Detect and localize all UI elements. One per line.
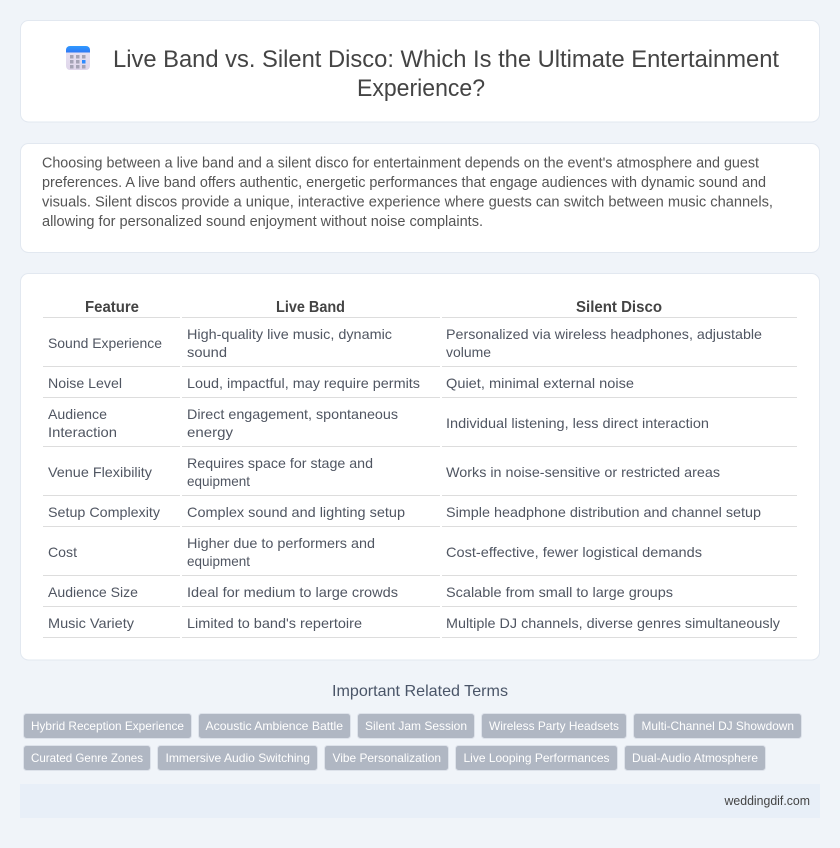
tag [198, 714, 350, 738]
row: setup complexity: Setup Complexity [48, 504, 160, 520]
row: music variety: Limited to band's repertoire [187, 615, 362, 631]
row: sound experience: sound [187, 344, 227, 360]
tag [634, 714, 802, 738]
intro text [42, 156, 773, 230]
icon: calendar [66, 46, 90, 70]
heading: important related terms: Important Related Terms [332, 683, 508, 700]
row: music variety: Music Variety [48, 615, 134, 631]
tag: Acoustic Ambience Battle [206, 719, 343, 733]
title [113, 46, 779, 102]
tag [324, 746, 448, 770]
title: Live Band vs. Silent Disco: Which Is the Ultimate Entertainment [113, 46, 779, 73]
intro text: preferences. A live band offers authentic, energetic performances that engage audiences with dynamic sound and [42, 175, 766, 191]
tag: Hybrid Reception Experience [31, 719, 184, 733]
row: audience interaction: Individual listening, less direct interaction [446, 415, 709, 431]
tag: Live Looping Performances [464, 751, 610, 765]
tag [24, 746, 150, 770]
row: noise level [48, 375, 634, 391]
tag [482, 714, 626, 738]
row: cost: Cost [48, 544, 77, 560]
row: setup complexity [48, 504, 761, 520]
row: audience interaction: energy [187, 424, 233, 440]
row: audience size: Audience Size [48, 584, 138, 600]
tag [24, 714, 192, 738]
panel: header [20, 20, 820, 122]
row: venue flexibility: Requires space for stage and [187, 455, 373, 471]
row: sound experience [48, 326, 762, 360]
row: audience size: Scalable from small to large groups [446, 584, 673, 600]
row: venue flexibility: equipment [187, 473, 250, 489]
row: setup complexity: Simple headphone distribution and channel setup [446, 504, 761, 520]
row: noise level: Noise Level [48, 375, 122, 391]
row: noise level: Quiet, minimal external noise [446, 375, 634, 391]
row: noise level: Loud, impactful, may require permits [187, 375, 420, 391]
tag [456, 746, 618, 770]
row: cost: Higher due to performers and [187, 535, 375, 551]
row: sound experience: Sound Experience [48, 335, 162, 351]
row: cost [48, 535, 702, 569]
row: sound experience: Personalized via wireless headphones, adjustable [446, 326, 762, 342]
panel: intro paragraph [20, 144, 820, 252]
row: audience size: Ideal for medium to large crowds [187, 584, 398, 600]
tag [158, 746, 318, 770]
tag [358, 714, 474, 738]
row: sound experience: High-quality live music, dynamic [187, 326, 392, 342]
row: audience size [48, 584, 673, 600]
intro text: Choosing between a live band and a silent disco for entertainment depends on the event's atmosphere and guest [42, 156, 759, 172]
tag: Dual-Audio Atmosphere [632, 751, 758, 765]
table header row: Feature [85, 299, 139, 316]
table header row: Live Band [276, 299, 345, 316]
title: Experience? [357, 75, 485, 102]
tag: Immersive Audio Switching [166, 751, 310, 765]
row: music variety: Multiple DJ channels, diverse genres simultaneously [446, 615, 780, 631]
table header row: Silent Disco [576, 299, 662, 316]
row: audience interaction: Interaction [48, 424, 117, 440]
table header row [85, 299, 662, 316]
row: cost: Cost-effective, fewer logistical demands [446, 544, 702, 560]
related term tags [24, 714, 802, 770]
panel: comparison table [20, 274, 820, 660]
row: venue flexibility: Venue Flexibility [48, 464, 152, 480]
row: music variety [48, 615, 780, 631]
row: venue flexibility [48, 455, 720, 489]
row: cost: equipment [187, 553, 250, 569]
tag: Vibe Personalization [332, 751, 441, 765]
footer [20, 784, 820, 818]
row: audience interaction: Direct engagement, spontaneous [187, 406, 398, 422]
tag: Wireless Party Headsets [489, 719, 619, 733]
intro text: visuals. Silent discos provide a unique, interactive experience where guests can switch between music channels, [42, 194, 773, 210]
row: audience interaction: Audience [48, 406, 107, 422]
tag: Curated Genre Zones [31, 751, 143, 765]
row: audience interaction [48, 406, 709, 440]
row: sound experience: volume [446, 344, 491, 360]
intro text: allowing for personalized sound enjoyment without noise complaints. [42, 214, 483, 230]
footer source text: weddingdif.com [724, 794, 810, 808]
row: venue flexibility: Works in noise-sensitive or restricted areas [446, 464, 720, 480]
tag: Multi-Channel DJ Showdown [642, 719, 794, 733]
tag: Silent Jam Session [365, 719, 467, 733]
tag [624, 746, 766, 770]
row: setup complexity: Complex sound and lighting setup [187, 504, 405, 520]
